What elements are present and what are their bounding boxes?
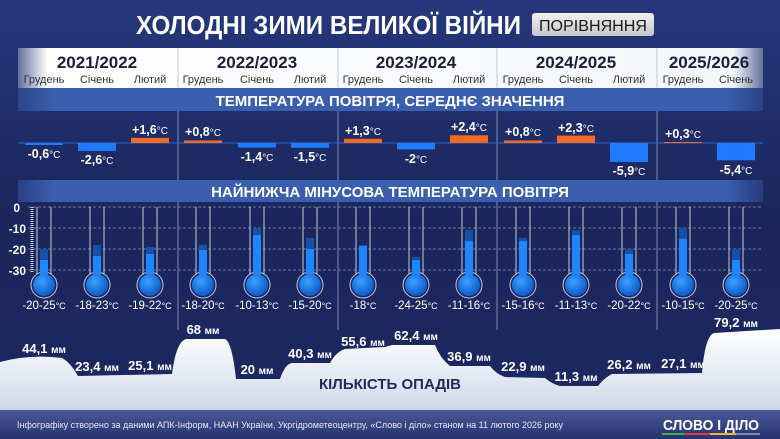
snow: precipitation: 11,3 мм [554, 369, 598, 384]
header: years and months: 2023/2024 [376, 53, 457, 72]
snow: precipitation: 55,6 мм [341, 334, 385, 349]
thermometers [22, 207, 758, 312]
snow: precipitation: 25,1 мм [128, 358, 172, 373]
header: years and months: Грудень [24, 74, 65, 86]
bar chart: average temperature: -0,6°C [28, 147, 60, 161]
snow: precipitation: 62,4 мм [394, 328, 438, 343]
snow: precipitation: 36,9 мм [447, 349, 491, 364]
bar chart: average temperature: +0,8°C [505, 125, 541, 139]
header: years and months: Грудень [503, 74, 544, 86]
label: precipitation: КІЛЬКІСТЬ ОПАДІВ [319, 376, 461, 393]
band: lowest temperature [18, 180, 763, 202]
title: ХОЛОДНІ ЗИМИ ВЕЛИКОЇ ВІЙНИ [136, 10, 521, 40]
thermometers: -15-20°C [288, 300, 332, 312]
thermometers: -11-13°C [555, 300, 598, 312]
axis scale [9, 201, 763, 278]
thermometers: -18°C [350, 300, 377, 312]
header: years and months: Січень [559, 74, 593, 86]
thermometers: -20-25°C [714, 300, 758, 312]
bar chart: average temperature: +1,6°C [132, 123, 168, 137]
header: years and months: Січень [80, 74, 114, 86]
header: years and months: Січень [719, 74, 753, 86]
badge: comparison: ПОРІВНЯННЯ [539, 18, 647, 35]
snow: precipitation: 79,2 мм [714, 315, 758, 330]
header: years and months: Грудень [343, 74, 384, 86]
thermometers: -20-22°C [607, 300, 651, 312]
bar chart: average temperature: +2,3°C [558, 121, 594, 135]
thermometers: -19-22°C [128, 300, 172, 312]
snow: precipitation: 26,2 мм [607, 357, 651, 372]
badge: comparison [532, 13, 654, 36]
thermometers: -20-25°C [22, 300, 66, 312]
header: years and months [18, 48, 763, 88]
band: lowest temperature: НАЙНИЖЧА МІНУСОВА ТЕМПЕРАТУРА ПОВІТРЯ [211, 183, 569, 201]
header: years and months: Грудень [183, 74, 224, 86]
bar chart: average temperature: -2°C [405, 152, 427, 166]
snow: precipitation: 40,3 мм [288, 346, 332, 361]
bar chart: average temperature: -5,9°C [613, 164, 645, 178]
header: years and months: 2022/2023 [217, 53, 297, 72]
footer: Інфографіку створено за даними АПК-Інформ, НААН України, Укргідрометеоцентру, «Слово і діло» станом на 11 лютого 2026 року [17, 420, 564, 430]
axis scale: -30 [9, 264, 26, 278]
header: years and months: 2021/2022 [57, 53, 137, 72]
thermometers: -11-16°C [448, 300, 491, 312]
thermometers: -18-20°C [181, 300, 225, 312]
thermometers: -18-23°C [75, 300, 119, 312]
axis scale: 0 [13, 201, 20, 215]
band: average temperature [18, 88, 763, 111]
bar chart: average temperature: -2,6°C [81, 153, 113, 167]
bar chart: average temperature: -1,5°C [294, 150, 326, 164]
snow: precipitation [0, 315, 780, 439]
bar chart: average temperature: +1,3°C [345, 124, 381, 138]
thermometers: -10-13°C [235, 300, 279, 312]
band: average temperature: ТЕМПЕРАТУРА ПОВІТРЯ, СЕРЕДНЄ ЗНАЧЕННЯ [216, 93, 564, 110]
header: years and months: Січень [399, 74, 433, 86]
snow: precipitation: 23,4 мм [75, 359, 119, 374]
bar chart: average temperature: +0,8°C [185, 125, 221, 139]
header: years and months: 2024/2025 [536, 53, 616, 72]
axis scale: -20 [9, 243, 26, 257]
bar chart: average temperature [18, 120, 763, 178]
bar chart: average temperature: -5,4°C [720, 163, 752, 177]
header: years and months: 2025/2026 [669, 53, 749, 72]
thermometers: -10-15°C [661, 300, 705, 312]
footer [0, 410, 780, 439]
thermometers: -24-25°C [394, 300, 438, 312]
snow: precipitation: 20 мм [241, 362, 273, 377]
header: years and months: Лютий [294, 74, 326, 86]
snow: precipitation: 22,9 мм [501, 359, 545, 374]
header: years and months: Січень [240, 74, 274, 86]
header: years and months: Лютий [453, 74, 485, 86]
header: years and months: Лютий [134, 74, 166, 86]
axis scale: -10 [9, 222, 26, 236]
header: years and months: Лютий [613, 74, 645, 86]
bar chart: average temperature: +0,3°C [665, 127, 701, 141]
snow: precipitation: 27,1 мм [661, 356, 705, 371]
snow: precipitation: 68 мм [187, 322, 219, 337]
bar chart: average temperature: +2,4°C [451, 120, 487, 134]
thermometers: -15-16°C [501, 300, 545, 312]
header: years and months: Грудень [663, 74, 704, 86]
bar chart: average temperature: -1,4°C [241, 150, 273, 164]
snow: precipitation: 44,1 мм [22, 341, 66, 356]
logo: СЛОВО І ДІЛО [663, 417, 759, 434]
